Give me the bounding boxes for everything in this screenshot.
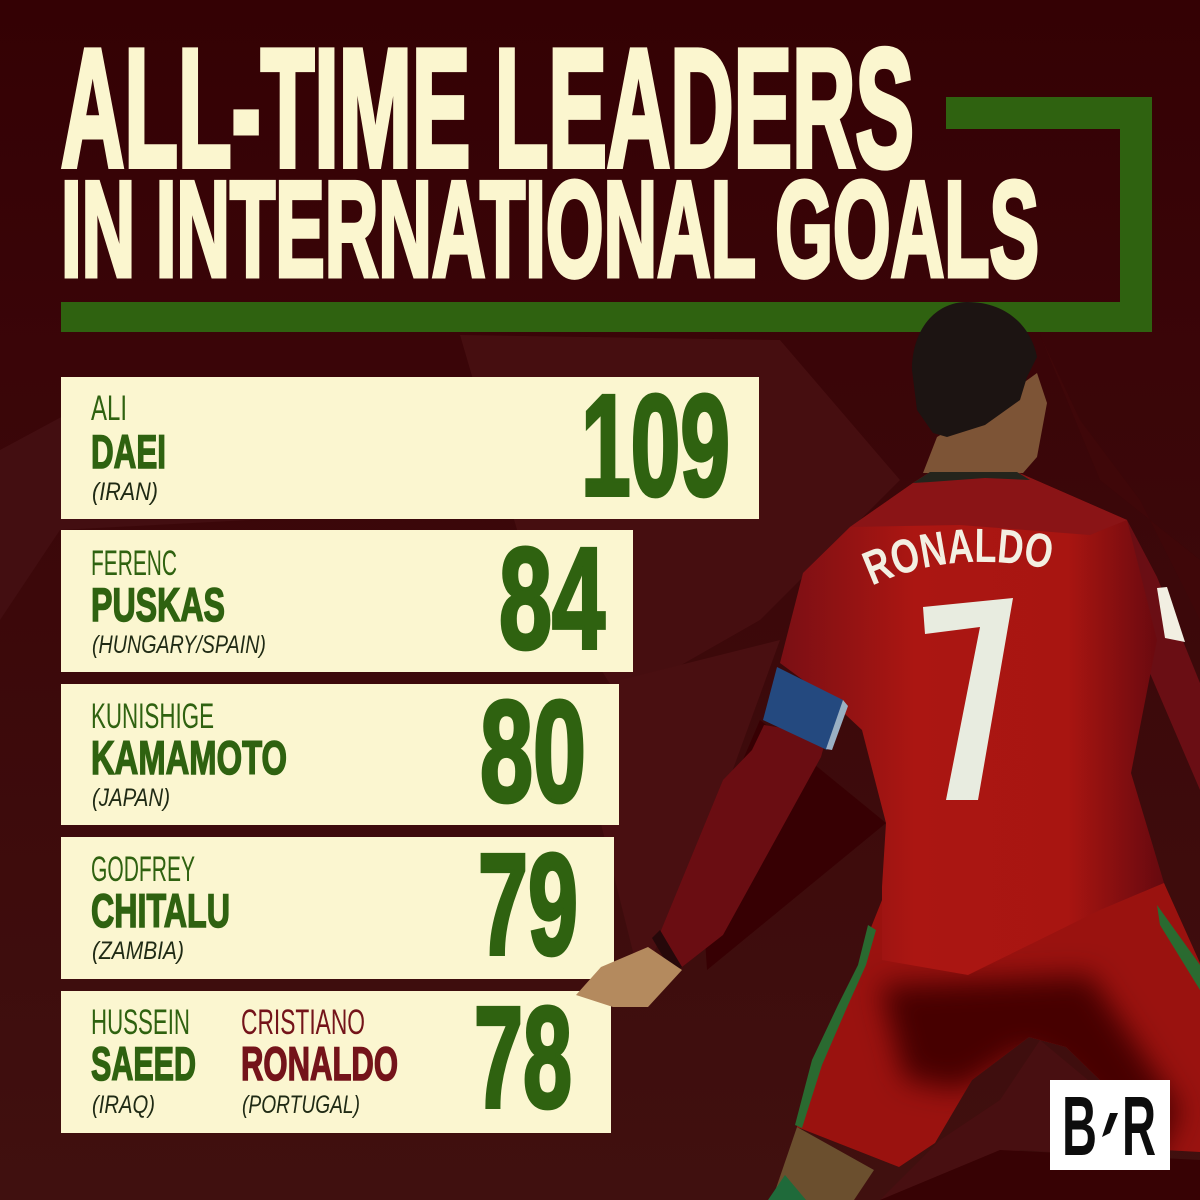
row: Kunishige Kamamoto 80 (61, 671, 619, 832)
row: Kunishige Kamamoto 80: KUNISHIGE (91, 697, 214, 736)
row: Ferenc Puskas 84: 84 (499, 518, 605, 679)
row: Godfrey Chitalu 79: CHITALU (91, 884, 230, 937)
row: Hussein Saeed and Cristiano Ronaldo 78 (61, 977, 611, 1138)
row: Ali Daei 109: DAEI (91, 425, 166, 478)
player: Cristiano Ronaldo from behind (576, 302, 1200, 1200)
row: Hussein Saeed and Cristiano Ronaldo 78: (PORTUGAL) (242, 1091, 360, 1119)
row: Godfrey Chitalu 79 (61, 824, 614, 985)
row: Ferenc Puskas 84 (61, 518, 633, 679)
row: Kunishige Kamamoto 80: KAMAMOTO (91, 731, 287, 784)
row: Ali Daei 109: (IRAN) (92, 478, 158, 506)
row: Hussein Saeed and Cristiano Ronaldo 78: (IRAQ) (92, 1091, 155, 1119)
row: Hussein Saeed and Cristiano Ronaldo 78: HUSSEIN (91, 1003, 190, 1042)
row: Kunishige Kamamoto 80: 80 (480, 671, 586, 832)
title (61, 14, 1039, 305)
row: Hussein Saeed and Cristiano Ronaldo 78: RONALDO (241, 1037, 398, 1090)
row: Ali Daei 109 (61, 365, 759, 526)
row: Ali Daei 109: 109 (581, 365, 730, 526)
Bleacher Report logo: R (1122, 1079, 1156, 1173)
shirt name: RONALDO (862, 528, 1052, 585)
row: Ferenc Puskas 84: FERENC (91, 544, 177, 583)
row: Kunishige Kamamoto 80: (JAPAN) (92, 784, 170, 812)
goal frame graphic (61, 97, 1152, 332)
Bleacher Report logo: B (1062, 1079, 1097, 1173)
row: Ali Daei 109: ALI (91, 389, 127, 428)
row: Godfrey Chitalu 79: 79 (478, 824, 578, 985)
row: Ferenc Puskas 84: PUSKAS (91, 578, 225, 631)
Bleacher Report logo (1050, 1079, 1170, 1173)
row: Godfrey Chitalu 79: (ZAMBIA) (92, 937, 184, 965)
row: Hussein Saeed and Cristiano Ronaldo 78: SAEED (91, 1037, 196, 1090)
row: Hussein Saeed and Cristiano Ronaldo 78: 78 (474, 977, 572, 1138)
row: Godfrey Chitalu 79: GODFREY (91, 850, 195, 889)
row: Ferenc Puskas 84: (HUNGARY/SPAIN) (92, 631, 266, 659)
shirt number (923, 598, 1013, 800)
row: Hussein Saeed and Cristiano Ronaldo 78: CRISTIANO (241, 1003, 365, 1042)
